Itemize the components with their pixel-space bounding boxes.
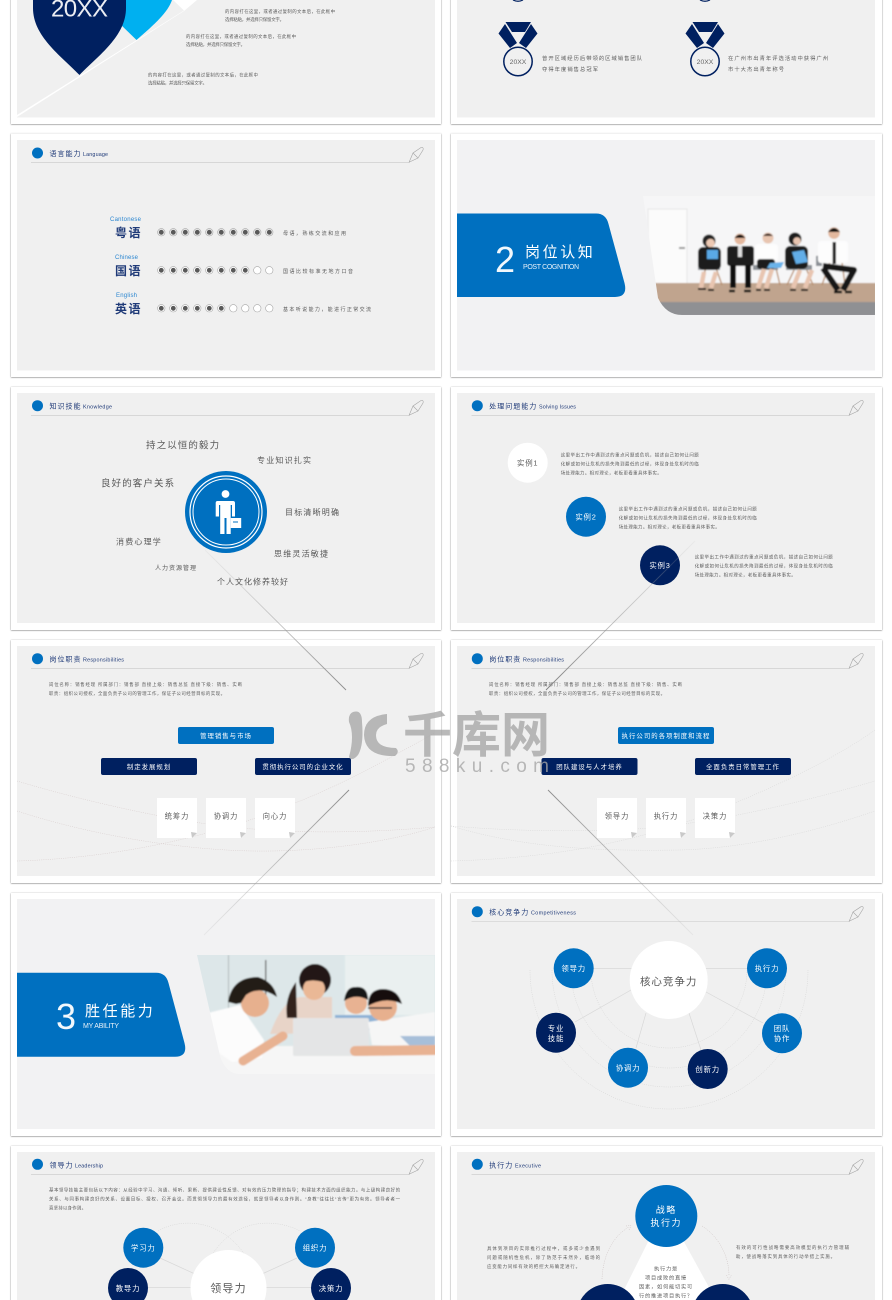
dotted curves xyxy=(17,733,435,861)
node: leadership: 领导力 xyxy=(561,964,586,973)
panel: section 2 post cognition xyxy=(451,134,882,377)
centre question text: 项目成败的直接 xyxy=(645,1274,687,1282)
section title: 岗位认知 xyxy=(525,244,595,261)
photo: four colleagues around a laptop xyxy=(197,955,435,1066)
heading xyxy=(472,1159,863,1174)
heading: Responsibilities xyxy=(523,658,564,664)
language row: Chinese: 国语 xyxy=(115,263,142,278)
icon: medal left xyxy=(498,22,538,76)
knowledge keyword cloud: 消费心理学 xyxy=(116,536,162,546)
node: innovation: 创新力 xyxy=(695,1065,720,1074)
panel: core competitiveness xyxy=(451,893,882,1136)
job description xyxy=(489,681,683,697)
sticky notes: 领导力 xyxy=(605,812,629,820)
case 1: 化解或如何让危机的损失降到最低的过程，体现身处危机时的临 xyxy=(561,460,699,468)
section title: 胜任能力 xyxy=(85,1003,155,1020)
bottom circle right xyxy=(692,1284,754,1300)
case 3: 实例3 xyxy=(649,561,671,570)
heading xyxy=(31,653,423,668)
section title xyxy=(83,1003,155,1030)
role boxes: 执行公司的各项制度和流程 xyxy=(622,731,710,740)
sticky notes: 向心力 xyxy=(263,812,287,820)
panel: executive ability xyxy=(451,1146,882,1300)
side text left: 具体到项目的实际推行过程中，或多或少会遇到 xyxy=(487,1245,600,1252)
leadership description: 直坚持以身作则。 xyxy=(49,1204,86,1212)
node: learning: 学习力 xyxy=(131,1244,156,1252)
language row: Chinese: Chinese xyxy=(115,255,139,261)
case 1: 这里举出工作中遇到过的重点问题或危机，描述自己如何让问题 xyxy=(561,452,699,458)
centre circle xyxy=(190,1250,266,1300)
node: coaching xyxy=(108,1268,148,1300)
panel: language ability xyxy=(11,134,441,377)
case 3: 场处理能力。相对理论，老板更看重具体事实。 xyxy=(695,572,796,578)
award text right xyxy=(728,54,828,73)
language row: Cantonese xyxy=(110,217,346,240)
job description: 岗位名称：销售经理 所属部门：销售部 直接上级：销售总监 直接下级：销售、实断 xyxy=(489,681,683,688)
centre circle: 核心竞争力 xyxy=(640,975,697,988)
panel: responsibilities right xyxy=(451,640,882,883)
photo: five candidates seated on chairs xyxy=(650,211,875,315)
dotted concentric arcs xyxy=(530,970,808,1109)
top circle: strategic execution: 战略 xyxy=(656,1204,677,1215)
knowledge keyword cloud: 持之以恒的毅力 xyxy=(146,440,220,452)
case 3: 化解或如何让危机的损失降到最低的过程，体现身处危机时的临 xyxy=(695,562,833,570)
node: organising xyxy=(295,1228,335,1268)
role boxes: 制定发展规划 xyxy=(127,762,171,771)
heading: Responsibilities xyxy=(83,658,124,664)
heading: Executive xyxy=(515,1163,541,1169)
knowledge keyword cloud: 思维灵活敏捷 xyxy=(274,548,329,558)
icon: medal right xyxy=(686,22,724,76)
language row: Chinese xyxy=(115,255,353,278)
node: coaching: 教导力 xyxy=(116,1284,140,1293)
section number: 2 xyxy=(495,239,515,280)
role boxes: 团队建设与人才培养 xyxy=(556,762,623,771)
award text left: 夺得年度销售总冠军 xyxy=(542,65,598,73)
top circle: strategic execution: 执行力 xyxy=(651,1217,682,1228)
timeline text blocks: 的内容打在这里，或者通过复制的文本后，在此框中 xyxy=(186,33,296,40)
case 1: 场处理能力。相对理论，老板更看重具体事实。 xyxy=(561,470,662,476)
node: decision: 决策力 xyxy=(319,1284,343,1293)
job description: 职责：组织公司授权，全面负责子公司的管理工作，保证子公司经营目标的实现。 xyxy=(489,690,665,697)
knowledge keyword cloud: 良好的客户关系 xyxy=(101,478,175,490)
role boxes: 全面负责日常管理工作 xyxy=(706,762,780,771)
node: coordination xyxy=(608,1048,648,1088)
side text left: 问题或随机性危机，除了防范于未然外，临场的 xyxy=(487,1254,601,1261)
panel: solving issues xyxy=(451,387,882,630)
sticky notes: 执行力 xyxy=(654,812,678,820)
centre question text xyxy=(639,1264,693,1300)
icon: logo mark xyxy=(349,711,398,759)
diagonal line: watermark upper right xyxy=(546,541,695,690)
knowledge keyword cloud: 个人文化修养较好 xyxy=(217,576,289,586)
watermark text: 千库网 xyxy=(403,709,550,763)
section title xyxy=(523,244,595,271)
sticky notes xyxy=(597,798,735,838)
central badge: businessman icon xyxy=(185,471,267,553)
heading: Language xyxy=(83,152,108,158)
case 2: 实例2 xyxy=(575,512,597,522)
timeline text blocks: 的内容打在这里，或者通过复制的文本后，在此框中 xyxy=(148,72,258,78)
heading: Leadership xyxy=(75,1163,103,1169)
node: professional skill xyxy=(536,1013,576,1053)
award text right: 市十大杰出青年称号 xyxy=(728,65,784,73)
case 2: 化解或如何让危机的损失降到最低的过程，体现身处危机时的临 xyxy=(619,514,757,522)
heading xyxy=(31,400,423,416)
cut-off medal remnants xyxy=(513,0,710,1)
side text left: 应变能力同样有效的把控大局确定进行。 xyxy=(487,1263,580,1270)
centre question text: 行的推进项目执行？ xyxy=(639,1292,693,1300)
node: teamwork xyxy=(762,1013,802,1053)
leadership description xyxy=(49,1186,401,1212)
blue section banner xyxy=(457,214,625,297)
heading: 核心竞争力 xyxy=(489,908,529,917)
panel: slide top left timeline xyxy=(11,0,441,124)
spokes xyxy=(575,968,763,1050)
job description xyxy=(49,681,243,697)
award text left xyxy=(542,54,643,73)
heading: 执行力 xyxy=(489,1160,513,1169)
heading: 领导力 xyxy=(50,1160,74,1169)
language row: Cantonese: 母语，熟练交流和应用 xyxy=(283,230,346,237)
language row: English: English xyxy=(116,293,137,299)
dotted curves xyxy=(451,730,875,861)
sticky notes xyxy=(157,798,295,838)
heading xyxy=(31,1159,423,1174)
role boxes: 管理销售与市场 xyxy=(200,731,252,740)
blue section banner xyxy=(17,973,185,1057)
heading xyxy=(472,653,863,668)
section title: POST COGNITION xyxy=(523,264,579,271)
diagonal line: watermark lower right xyxy=(548,790,693,935)
icon: medal right: 20XX xyxy=(697,59,714,66)
node: teamwork: 协作 xyxy=(774,1034,790,1043)
case 1 xyxy=(508,443,699,483)
dotted arcs xyxy=(158,1223,300,1255)
heading: 处理问题能力 xyxy=(489,402,537,411)
case 3: 这里举出工作中遇到过的重点问题或危机，描述自己如何让问题 xyxy=(695,554,833,560)
node: professional skill: 技能 xyxy=(548,1034,564,1043)
heading: 知识技能 xyxy=(50,402,82,411)
heading xyxy=(472,400,863,416)
role boxes xyxy=(542,727,791,775)
node: teamwork: 团队 xyxy=(774,1024,790,1033)
centre circle: 领导力 xyxy=(210,1282,247,1295)
heading xyxy=(472,906,863,922)
side text right: 助，使战略落实到具体的行动举措上实施。 xyxy=(736,1253,835,1260)
timeline text blocks: 选择粘贴，并选择只保留文字。 xyxy=(186,41,245,48)
leadership description: 基本领导技能主要包括以下内容：从经验中学习、沟通、倾听、果断、提供建设性反馈、对有效的压力管理的指导；构建技术方面的组织能力。与上级构建良好的 xyxy=(49,1186,401,1194)
arrow: left curve up xyxy=(602,1226,631,1279)
watermark: 588ku logo xyxy=(349,709,550,777)
side text left xyxy=(487,1245,601,1270)
node: decision xyxy=(311,1268,351,1300)
white centre triangle xyxy=(619,1240,716,1300)
node: coordination: 协调力 xyxy=(616,1064,640,1072)
case 2: 这里举出工作中遇到过的重点问题或危机，描述自己如何让问题 xyxy=(619,506,757,512)
leadership description: 关系、与同事构建良好的关系、设置目标、授权、召开会议。而贯彻领导力的最有效途径，就是领导者以身作则。“身教”往往比“言传”更为有效。领导者者一 xyxy=(49,1196,401,1202)
node: learning xyxy=(123,1228,163,1268)
node: execution: 执行力 xyxy=(755,964,779,973)
role boxes: 贯彻执行公司的企业文化 xyxy=(262,762,344,771)
node: organising: 组织力 xyxy=(303,1244,327,1252)
job description: 职责：组织公司授权，全面负责子公司的管理工作，保证子公司经营目标的实现。 xyxy=(49,690,225,697)
side text right xyxy=(736,1244,850,1260)
diagonal line: watermark upper left xyxy=(205,550,346,690)
heading: Competitiveness xyxy=(531,911,576,917)
diagonal line: watermark lower left xyxy=(204,790,349,935)
panel: slide top right awards xyxy=(451,0,882,124)
centre question text: 执行力是 xyxy=(654,1264,678,1272)
centre circle xyxy=(630,941,708,1019)
sticky notes: 统筹力 xyxy=(165,812,189,820)
case 1: 实例1 xyxy=(517,458,538,468)
section number: 3 xyxy=(56,996,76,1037)
heading: Knowledge xyxy=(83,405,112,411)
sticky notes: 协调力 xyxy=(214,812,238,820)
heart: navy balloon xyxy=(33,0,126,75)
language row: English: 基本听说能力，能进行正常交流 xyxy=(283,306,371,313)
knowledge keyword cloud: 人力资源管理 xyxy=(155,564,197,572)
panel: section 3 my ability xyxy=(11,893,441,1136)
watermark url: 588ku.com xyxy=(405,756,549,777)
language row: English: 英语 xyxy=(115,301,142,316)
knowledge keyword cloud: 专业知识扎实 xyxy=(257,455,312,465)
case 2: 场处理能力。相对理论，老板更看重具体事实。 xyxy=(619,524,720,530)
side text right: 有效的可行性战略需要高效模型的执行力管理辅 xyxy=(736,1244,850,1251)
top circle: strategic execution xyxy=(635,1185,697,1247)
timeline text blocks: 的内容打在这里，或者通过复制的文本后，在此框中 xyxy=(225,8,335,15)
sticky notes: 决策力 xyxy=(703,812,727,820)
award text left: 曾开区域经历后带领的区域销售团队 xyxy=(542,54,643,62)
knowledge keyword cloud xyxy=(101,440,340,586)
node: leadership xyxy=(554,948,594,988)
heading xyxy=(31,147,423,162)
case 3 xyxy=(640,545,833,585)
award text right: 在广州市出青年评选活动中获得广州 xyxy=(728,54,828,62)
panel: responsibilities left xyxy=(11,640,441,883)
knowledge keyword cloud: 目标清晰明确 xyxy=(285,507,340,517)
node: execution xyxy=(747,948,787,988)
spokes xyxy=(148,1258,311,1288)
panel: knowledge skills xyxy=(11,387,441,630)
heading: 岗位职责 xyxy=(50,655,82,664)
icon: medal left: 20XX xyxy=(510,59,527,66)
heading: 岗位职责 xyxy=(489,655,521,664)
heart: cyan balloon xyxy=(118,0,172,40)
node: professional skill: 专业 xyxy=(548,1024,564,1033)
job description: 岗位名称：销售经理 所属部门：销售部 直接上级：销售总监 直接下级：销售、实断 xyxy=(49,681,243,688)
heading: Solving Issues xyxy=(539,405,576,411)
centre question text: 因素，如何能切实可 xyxy=(639,1282,693,1290)
panel: leadership xyxy=(11,1146,441,1300)
section title: MY ABILITY xyxy=(83,1023,119,1030)
node: innovation xyxy=(688,1049,728,1089)
white diagonal band xyxy=(17,0,197,117)
bottom circle left xyxy=(577,1284,639,1300)
role boxes xyxy=(101,727,351,775)
timeline text blocks: 选择粘贴，并选择只保留文字。 xyxy=(225,16,284,23)
heading: 语言能力 xyxy=(50,149,82,158)
language row: Chinese: 国语比较标准无地方口音 xyxy=(283,268,353,275)
language row: English xyxy=(115,293,371,316)
case 2 xyxy=(566,497,757,537)
arrow: right curve down xyxy=(702,1226,732,1280)
timeline text blocks xyxy=(148,8,335,86)
timeline text blocks: 选择粘贴，并选择只保留文字。 xyxy=(148,80,207,86)
language row: Cantonese: Cantonese xyxy=(110,217,142,223)
language row: Cantonese: 粤语 xyxy=(115,225,142,240)
